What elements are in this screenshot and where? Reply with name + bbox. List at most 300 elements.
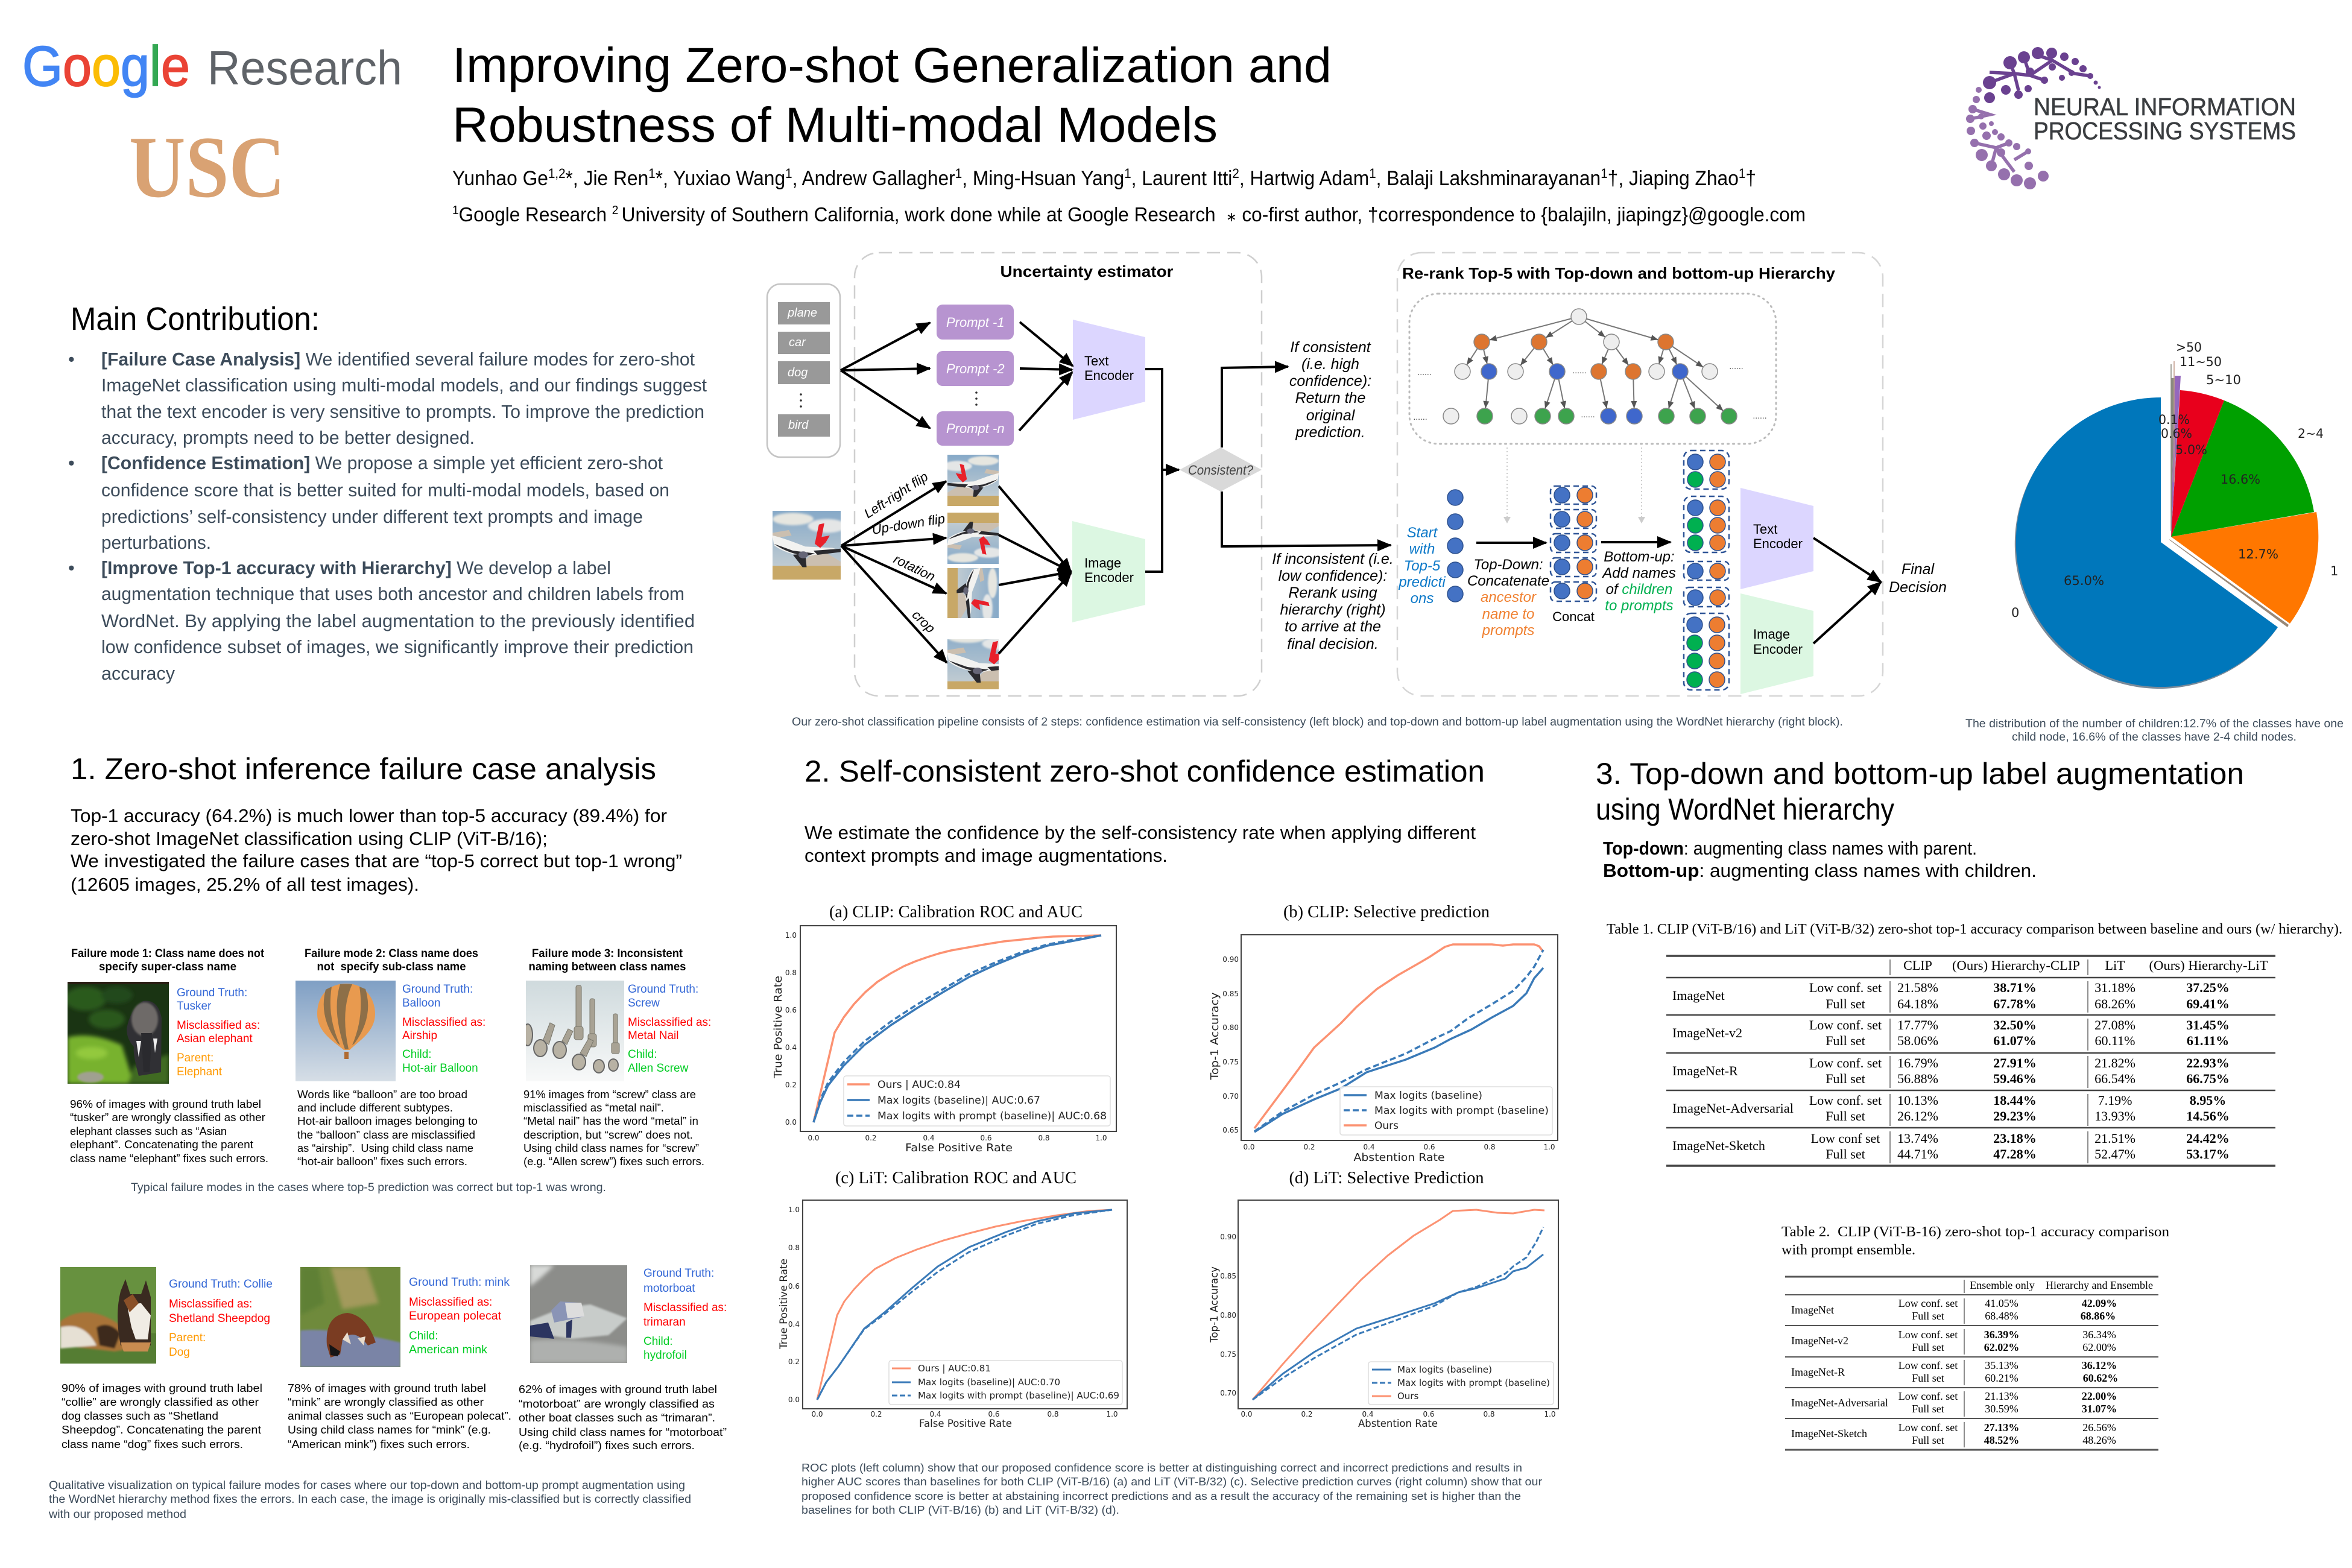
chart c: LiT ROC: 1.0: [788, 1206, 800, 1214]
table 1: 27.91%: [1993, 1055, 2037, 1070]
chart a: CLIP ROC: True Positive Rate: [772, 976, 785, 1079]
table 1: 68.26%: [2094, 996, 2135, 1011]
example: motorboat: Misclassified as:: [643, 1301, 727, 1314]
table 1: Low conf set: [1811, 1131, 1880, 1146]
chart d: LiT selective prediction: Top-1 Accuracy: [1209, 1266, 1221, 1343]
chart a: CLIP ROC: 0.0: [785, 1118, 797, 1127]
text encoder: Encoder: [1084, 368, 1134, 383]
text block: section 1 intro: We investigated the failure cases that are “top-5 correct but top-1 wrong”: [71, 850, 682, 871]
chart c: LiT ROC: 0.2: [870, 1410, 882, 1418]
authors: 1: [785, 166, 792, 181]
caption: ROC and selective prediction: baselines for both CLIP (ViT-B/16) (b) and LiT (ViT-B/32) (d).: [801, 1503, 1119, 1516]
arrow: bottom-up: [1601, 541, 1671, 543]
text: consistent outcome: (i.e. high: [1301, 356, 1359, 373]
table 1: 24.42%: [2186, 1131, 2230, 1146]
text: start with top-5 predictions: Start: [1407, 525, 1438, 541]
chart b: CLIP selective prediction: 0.85: [1222, 990, 1239, 998]
failure mode 3: Misclassified as:: [628, 1016, 711, 1029]
text block: section 1 intro: [71, 805, 682, 895]
flow: encoder outputs to consistency check: [1145, 339, 1394, 653]
text: top-down concatenate: Concatenate: [1467, 573, 1549, 589]
class name list: plane: [787, 306, 817, 320]
text: start with top-5 predictions: predicti: [1398, 574, 1446, 590]
failure mode 2: Balloon: [402, 997, 440, 1010]
chart b: CLIP selective prediction: Top-1 Accuracy: [1209, 992, 1221, 1081]
table 1: ImageNet: [1672, 988, 1725, 1003]
text block: contribution bullets: low confidence subset of images, we significantly improve their prediction: [101, 637, 694, 657]
authors: 1: [955, 166, 962, 181]
example: mink: Using child class names for “mink” (e.g.: [288, 1423, 491, 1436]
class name list: [767, 284, 840, 457]
failure mode 3: Screw: [628, 997, 660, 1010]
failure mode 3: Metal Nail: [628, 1029, 678, 1042]
table 2: 27.13%: [1984, 1421, 2019, 1434]
text block: contribution bullets: accuracy, prompts need to be better designed.: [101, 428, 475, 448]
table 1: 21.58%: [1897, 980, 1938, 995]
logo: Google Research: Research: [207, 41, 402, 95]
example: motorboat: motorboat: [643, 1282, 695, 1295]
chart b: CLIP selective prediction: [1209, 903, 1558, 1164]
chart b: CLIP selective prediction: 0.65: [1222, 1126, 1239, 1134]
failure mode 3: Ground Truth:: [628, 983, 698, 996]
title: [452, 38, 1332, 153]
table 2: 35.13%: [1985, 1359, 2018, 1371]
example: motorboat: trimaran: [643, 1316, 686, 1329]
image encoder: [1072, 521, 1145, 622]
table 2: 22.00%: [2082, 1390, 2117, 1402]
wordnet hierarchy tree: [1409, 294, 1776, 444]
image encoder: Image: [1084, 555, 1121, 571]
example: mink: Misclassified as:: [409, 1296, 492, 1309]
table 2: [1785, 1277, 2158, 1450]
caption: pie chart: The distribution of the number of children:12.7% of the classes have one: [1965, 718, 2344, 730]
text block: section 2 intro: [805, 822, 1476, 866]
chart c: LiT ROC: 1.0: [1106, 1410, 1118, 1418]
failure mode 2: and include different subtypes.: [297, 1101, 453, 1114]
augmentation labels: rotation: [891, 551, 938, 584]
failure mode 2: Misclassified as:: [402, 1016, 485, 1029]
failure mode 1: Failure mode 1: Class name does not: [71, 947, 265, 960]
chart a: CLIP ROC: Max logits with prompt (baseline)| AUC:0.68: [877, 1110, 1107, 1122]
chart d: LiT selective prediction: Max logits with prompt (baseline): [1397, 1377, 1550, 1388]
table 1: 47.28%: [1993, 1146, 2037, 1162]
wordnet hierarchy tree: ......: [1581, 409, 1595, 419]
augmentation labels: crop: [909, 607, 938, 636]
table 1: Low conf. set: [1809, 980, 1882, 995]
text block: contribution bullets: WordNet. By applying the label augmentation to the previously identified: [101, 611, 695, 631]
table 2: 30.59%: [1985, 1403, 2018, 1415]
decision diamond: [1180, 447, 1262, 492]
logo: Google Research: [22, 34, 402, 98]
pie chart: number of children: 5~10: [2206, 373, 2241, 387]
chart b: CLIP selective prediction: 0.80: [1222, 1023, 1239, 1032]
heading: main contribution: Main Contribution:: [71, 301, 320, 337]
table 1: 44.71%: [1897, 1146, 1938, 1162]
table 2: 36.39%: [1984, 1329, 2019, 1341]
chart d: LiT selective prediction: 0.8: [1483, 1410, 1495, 1418]
authors: , Balaji Lakshminarayanan: [1376, 167, 1601, 190]
authors: , Ming-Hsuan Yang: [962, 167, 1124, 190]
heading: re-rank: Re-rank Top-5 with Top-down and bottom-up Hierarchy: [1402, 264, 1836, 282]
failure mode 2: Child:: [402, 1048, 432, 1061]
failure mode 1: [65, 947, 268, 1165]
authors: , Laurent Itti: [1131, 167, 1232, 190]
arrows: image to augmentations, augmentations to encoder: [841, 481, 1071, 663]
failure mode 3: naming between class names: [528, 961, 686, 973]
text: start with top-5 predictions: [1398, 525, 1446, 607]
decision diamond: Consistent?: [1188, 463, 1254, 478]
table 2: 41.05%: [1985, 1297, 2018, 1309]
arrow: top-down: [1476, 542, 1546, 544]
failure mode 3: Using child class names for “screw”: [523, 1142, 699, 1154]
table 1: Full set: [1826, 1108, 1865, 1124]
chart b: CLIP selective prediction: 0.2: [1303, 1143, 1315, 1151]
text: bottom-up add names: Add names: [1601, 565, 1676, 581]
chart c: LiT ROC: 0.0: [788, 1396, 800, 1404]
affiliations: 1: [452, 204, 459, 217]
text: inconsistent outcome: Rerank using: [1288, 584, 1377, 601]
failure mode 2: [296, 947, 485, 1168]
table 2: ImageNet-Adversarial: [1791, 1397, 1888, 1409]
example: motorboat: Child:: [643, 1335, 673, 1348]
table 1: ImageNet-v2: [1672, 1025, 1742, 1040]
table 1: 59.46%: [1993, 1071, 2037, 1086]
table 1: (Ours) Hierarchy-LiT: [2149, 958, 2268, 973]
logo: NeurIPS: [1966, 47, 2296, 189]
example: mink: 78% of images with ground truth label: [288, 1382, 486, 1394]
text: top-down concatenate: [1467, 557, 1549, 639]
table 1: CLIP: [1903, 958, 1932, 973]
table 2 caption: [1781, 1224, 2169, 1258]
failure mode 3: misclassified as “metal nail”.: [523, 1101, 664, 1114]
text block: contribution bullets: •: [68, 558, 75, 578]
heading: section 3: 3. Top-down and bottom-up label augmentation: [1596, 757, 2244, 791]
pie chart: number of children: >50: [2176, 340, 2202, 355]
chart c: LiT ROC: 0.4: [788, 1320, 800, 1329]
wordnet hierarchy tree: ......: [1417, 367, 1432, 377]
table 1: 27.08%: [2094, 1017, 2135, 1032]
failure mode 1: Ground Truth:: [177, 987, 247, 999]
failure mode 1: 96% of images with ground truth label: [70, 1098, 261, 1110]
caption: ROC and selective prediction: [801, 1461, 1542, 1516]
text: consistent outcome: If consistent: [1290, 339, 1371, 356]
concat node pairs: [1551, 486, 1596, 624]
example: mink: Child:: [409, 1330, 438, 1342]
chart c: LiT ROC: 0.6: [788, 1282, 800, 1291]
heading: uncertainty estimator: Uncertainty estimator: [1000, 262, 1174, 280]
failure mode 3: [523, 947, 711, 1168]
table 2: Full set: [1912, 1372, 1944, 1384]
table 1: 53.17%: [2186, 1146, 2230, 1162]
pie chart: number of children: [2011, 340, 2338, 689]
caption: ROC and selective prediction: proposed confidence score is better at abstaining incorrect predictions and as a result the accuracy of the remaining set is higher than the: [801, 1490, 1521, 1502]
text block: contribution bullets: [Improve Top-1 accuracy with Hierarchy] We develop a label: [101, 558, 611, 578]
augmentation labels: Left-right flip: [861, 469, 931, 521]
chart b: CLIP selective prediction: 1.0: [1543, 1143, 1555, 1151]
table 2: 60.62%: [2083, 1372, 2118, 1384]
affiliations: ∗ co-first author, †correspondence to {balajiln, jiapingz}@google.com: [1226, 203, 1832, 226]
table 2: 68.86%: [2081, 1310, 2116, 1322]
text encoder (re-rank): [1740, 488, 1813, 589]
table 1: 52.47%: [2094, 1146, 2135, 1162]
text block: contribution bullets: ImageNet classification using multi-modal models, and our findings suggest: [101, 375, 707, 396]
arrows: list to prompts, prompts to encoder: [841, 322, 1073, 431]
prompt boxes: Prompt -2: [946, 361, 1005, 376]
title: Improving Zero-shot Generalization and: [452, 38, 1332, 93]
failure mode 2: “hot-air balloon” fixes such errors.: [297, 1155, 467, 1168]
chart c: LiT ROC: True Positive Rate: [778, 1259, 790, 1350]
failure mode 2: Words like “balloon” are too broad: [297, 1088, 467, 1101]
table 1: 7.19%: [2098, 1093, 2132, 1108]
affiliations: Google Research: [459, 203, 612, 226]
table 2: 31.07%: [2082, 1403, 2117, 1415]
panel: main contribution: [68, 301, 707, 684]
pie chart: number of children: 2~4: [2298, 426, 2324, 441]
authors: , Hartwig Adam: [1239, 167, 1369, 190]
caption: pie chart: [1965, 718, 2344, 744]
table 2: ImageNet-v2: [1791, 1335, 1848, 1347]
table 2: Low conf. set: [1898, 1297, 1958, 1309]
logo: NeurIPS: NEURAL INFORMATION: [2034, 93, 2296, 121]
text encoder (re-rank): Text: [1753, 522, 1777, 537]
text encoder (re-rank): Encoder: [1753, 536, 1803, 551]
example: motorboat: hydrofoil: [643, 1349, 687, 1362]
failure mode 3: Allen Screw: [628, 1062, 689, 1075]
pie chart: number of children: 12.7%: [2238, 547, 2278, 561]
table 2: Low conf. set: [1898, 1421, 1958, 1434]
heading: section 3: [1596, 757, 2244, 826]
chart b: CLIP selective prediction: Abstention Rate: [1353, 1151, 1445, 1164]
failure mode 3: 91% images from “screw” class are: [523, 1088, 696, 1101]
text: start with top-5 predictions: ons: [1411, 590, 1434, 607]
table 1: 69.41%: [2186, 996, 2230, 1011]
text block: contribution bullets: predictions’ self-consistency under different text prompts and image: [101, 507, 643, 527]
text: top-down concatenate: prompts: [1482, 622, 1534, 639]
chart a: CLIP ROC: 0.2: [865, 1134, 877, 1142]
failure mode 1: specify super-class name: [99, 961, 236, 973]
table 1: 26.12%: [1897, 1108, 1938, 1124]
chart c: LiT ROC: Max logits with prompt (baseline)| AUC:0.69: [918, 1390, 1119, 1401]
text: top-down concatenate: Top-Down:: [1473, 557, 1543, 573]
chart d: LiT selective prediction: [1209, 1169, 1558, 1430]
chart d: LiT selective prediction: Ours: [1397, 1391, 1418, 1402]
example: collie: Shetland Sheepdog: [169, 1312, 270, 1325]
text block: section 1 intro: zero-shot ImageNet classification using CLIP (ViT-B/16);: [71, 828, 548, 849]
text: consistent outcome: [1289, 339, 1371, 441]
table 1: 23.18%: [1993, 1131, 2037, 1146]
table 2: ImageNet: [1791, 1304, 1834, 1316]
failure mode 1: class name “elephant” fixes such errors.: [70, 1152, 268, 1165]
example: collie: Sheepdog”. Concatenating the parent: [62, 1423, 261, 1436]
chart a: CLIP ROC: 1.0: [785, 931, 797, 940]
table 1: Full set: [1826, 996, 1865, 1011]
chart d: LiT selective prediction: 0.70: [1220, 1389, 1236, 1397]
class name list: car: [789, 336, 806, 349]
text block: section 1 intro: (12605 images, 25.2% of all test images).: [71, 874, 419, 895]
failure mode 3: (e.g. “Allen screw”) fixes such errors.: [523, 1155, 704, 1168]
example: motorboat: Using child class names for “motorboat”: [519, 1426, 727, 1438]
pie chart: number of children: 0: [2011, 605, 2019, 620]
table 1: (Ours) Hierarchy-CLIP: [1952, 958, 2080, 973]
table 1: 66.75%: [2186, 1071, 2230, 1086]
table 1: 13.93%: [2094, 1108, 2135, 1124]
text: inconsistent outcome: [1272, 551, 1394, 653]
chart b: CLIP selective prediction: Max logits (baseline): [1374, 1090, 1482, 1102]
authors: 1: [1124, 166, 1131, 181]
pie chart: number of children: 65.0%: [2064, 574, 2104, 588]
caption: ROC and selective prediction: higher AUC scores than baselines for both CLIP (ViT-B/16) (a) and LiT (ViT-B/32) (c). Selective prediction curves (right column) show that our: [801, 1475, 1542, 1488]
table 1 caption: Table 1. CLIP (ViT-B/16) and LiT (ViT-B/32) zero-shot top-1 accuracy comparison between baseline and ours (w/ hierarchy).: [1607, 922, 2342, 937]
table 2: Low conf. set: [1898, 1329, 1958, 1341]
chart b: CLIP selective prediction: 0.6: [1423, 1143, 1435, 1151]
augmented image: crop: [947, 639, 999, 689]
chart c: LiT ROC: (c) LiT: Calibration ROC and AUC: [835, 1169, 1076, 1187]
example: mink: animal classes such as “European polecat”.: [288, 1409, 511, 1422]
table 1: 29.23%: [1993, 1108, 2037, 1124]
text: bottom-up add names: of children: [1606, 581, 1672, 598]
table 1: ImageNet-Adversarial: [1672, 1101, 1794, 1116]
image encoder (re-rank): Image: [1753, 627, 1790, 642]
chart c: LiT ROC: Max logits (baseline)| AUC:0.70: [918, 1377, 1060, 1388]
text: final decision: [1889, 561, 1947, 596]
chart b: CLIP selective prediction: Max logits with prompt (baseline): [1374, 1105, 1549, 1117]
wordnet hierarchy tree: ......: [1572, 365, 1587, 375]
example: motorboat: other boat classes such as “trimaran”.: [519, 1411, 715, 1424]
text: final decision: Final: [1902, 561, 1935, 578]
chart d: LiT selective prediction: (d) LiT: Selective Prediction: [1289, 1169, 1484, 1187]
failure mode 1: elephant”. Concatenating the parent: [70, 1138, 253, 1151]
pie chart: number of children: 0.6%: [2161, 426, 2192, 441]
table 1: Low conf. set: [1809, 1055, 1882, 1070]
pie chart: number of children: 1: [2330, 564, 2338, 578]
text: top-down concatenate: name to: [1482, 606, 1534, 622]
chart a: CLIP ROC: [772, 903, 1116, 1154]
prompt boxes: Prompt -1: [946, 315, 1005, 330]
text: bottom-up add names: to prompts: [1605, 598, 1674, 614]
panel: section 1 failure case analysis: [48, 752, 727, 1521]
chart a: CLIP ROC: False Positive Rate: [905, 1142, 1013, 1154]
table 2: 62.02%: [1984, 1341, 2019, 1353]
example: motorboat: Ground Truth:: [643, 1267, 714, 1280]
authors: 1: [648, 166, 656, 181]
caption: failure modes: Typical failure modes in the cases where top-5 prediction was correct but top-1 was wrong.: [131, 1181, 606, 1194]
chart a: CLIP ROC: 0.8: [1038, 1134, 1050, 1142]
caption: qualitative visualization: [48, 1479, 691, 1521]
pie chart: number of children: 16.6%: [2221, 472, 2260, 487]
table 1: LiT: [2105, 958, 2125, 973]
title: Robustness of Multi-modal Models: [452, 98, 1218, 153]
text: consistent outcome: Return the: [1295, 390, 1365, 406]
table 1: 31.18%: [2094, 980, 2135, 995]
table 1: Full set: [1826, 1033, 1865, 1048]
table 1: 21.82%: [2094, 1055, 2135, 1070]
photo: balloon: [296, 981, 396, 1081]
authors: 2: [1232, 166, 1239, 181]
wordnet hierarchy tree: ......: [1729, 361, 1743, 371]
text: consistent outcome: prediction.: [1295, 424, 1365, 441]
caption: qualitative visualization: the WordNet hierarchy method fixes the errors. In each case, the image is originally mis-classified but is correctly classified: [49, 1493, 691, 1506]
panel: re-rank with hierarchy: [1397, 253, 1947, 696]
table 1: Full set: [1826, 1146, 1865, 1162]
chart d: LiT selective prediction: Abstention Rate: [1358, 1418, 1438, 1430]
chart a: CLIP ROC: Max logits (baseline)| AUC:0.67: [877, 1095, 1040, 1107]
chart b: CLIP selective prediction: 0.8: [1484, 1143, 1496, 1151]
pie chart: number of children: 11~50: [2180, 355, 2222, 369]
example: motorboat: (e.g. “hydrofoil”) fixes such errors.: [519, 1439, 695, 1452]
failure mode 1: “tusker” are wrongly classified as other: [70, 1111, 265, 1124]
text block: contribution bullets: perturbations.: [101, 533, 211, 553]
text block: section 1 intro: Top-1 accuracy (64.2%) is much lower than top-5 accuracy (89.4%) for: [71, 805, 667, 826]
text: inconsistent outcome: If inconsistent (i.e.: [1272, 551, 1394, 567]
text: top-down concatenate: ancestor: [1481, 589, 1537, 605]
augmented image: rotation: [947, 568, 999, 618]
example: mink: “mink” are wrongly classified as other: [288, 1396, 484, 1408]
text: inconsistent outcome: final decision.: [1287, 636, 1379, 653]
example: collie: 90% of images with ground truth label: [62, 1382, 262, 1394]
example: collie: “collie” are wrongly classified as other: [62, 1396, 259, 1408]
failure mode 2: the “balloon” class are misclassified: [297, 1128, 475, 1141]
table 2: Full set: [1912, 1434, 1944, 1446]
chart b: CLIP selective prediction: Ours: [1374, 1120, 1399, 1132]
example: mink: [288, 1267, 511, 1450]
authors: 1: [1369, 166, 1376, 181]
table 1: 61.11%: [2187, 1033, 2229, 1048]
panel: uncertainty estimator: [767, 253, 1262, 696]
failure mode 2: not specify sub-class name: [317, 961, 466, 973]
failure mode 1: Parent:: [177, 1052, 213, 1064]
failure mode 1: Tusker: [177, 1000, 212, 1013]
text encoder: Text: [1084, 353, 1108, 368]
text: inconsistent outcome: low confidence):: [1279, 567, 1387, 584]
table 1: Low conf. set: [1809, 1093, 1882, 1108]
chart d: LiT selective prediction: 0.90: [1220, 1233, 1236, 1241]
image encoder: Encoder: [1084, 570, 1134, 585]
table 2: 21.13%: [1985, 1390, 2018, 1402]
table 2: Full set: [1912, 1341, 1944, 1353]
table 2: Hierarchy and Ensemble: [2046, 1279, 2153, 1291]
affiliations: 2: [612, 204, 622, 217]
text block: section 2 intro: We estimate the confidence by the self-consistency rate when applying different: [805, 822, 1476, 843]
authors: *, Jie Ren: [566, 167, 648, 190]
chart d: LiT selective prediction: 0.2: [1301, 1410, 1313, 1418]
chart a: CLIP ROC: 0.4: [785, 1043, 797, 1052]
augmentation labels: [861, 469, 946, 636]
logo: USC: USC: [129, 118, 285, 216]
chart c: LiT ROC: 0.2: [788, 1358, 800, 1366]
example: motorboat: “motorboat” are wrongly classified as: [519, 1397, 715, 1410]
authors: Yunhao Ge: [452, 167, 555, 190]
chart b: CLIP selective prediction: 0.90: [1222, 955, 1239, 964]
example: motorboat: [519, 1265, 727, 1452]
caption: qualitative visualization: with our proposed method: [48, 1508, 186, 1521]
augmentation labels: Up-down flip: [871, 511, 946, 537]
table 2: ImageNet-R: [1791, 1366, 1845, 1378]
failure mode 1: Asian elephant: [177, 1032, 253, 1045]
dashed frame: re-rank: [1397, 253, 1883, 696]
table 2: 26.56%: [2082, 1421, 2116, 1434]
table 1: [1666, 956, 2275, 1166]
chart d: LiT selective prediction: 0.80: [1220, 1311, 1236, 1320]
table 1: ImageNet-Sketch: [1672, 1138, 1765, 1153]
table 1: 38.71%: [1993, 980, 2037, 995]
arrow: consistent branch: [1222, 367, 1288, 447]
text block: section 3 intro: Top-down: augmenting class names with parent.: [1603, 838, 1977, 859]
failure mode 3: “Metal nail” has the word “metal” in: [523, 1114, 698, 1127]
photo: screws: [526, 981, 624, 1078]
table 2: Ensemble only: [1970, 1279, 2035, 1291]
text block: contribution bullets: •: [68, 453, 75, 473]
affiliations: University of Southern California, work done while at Google Research: [622, 203, 1226, 226]
